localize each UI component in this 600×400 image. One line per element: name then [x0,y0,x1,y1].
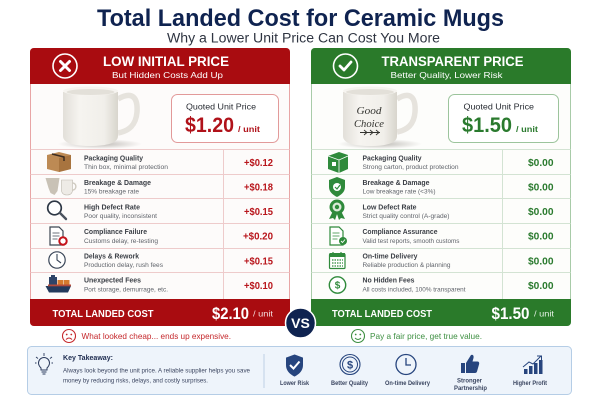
takeaway text: Key Takeaway: [63,353,113,362]
row: fees [46,275,273,294]
illustration: good choice mug [338,86,422,149]
row: compliance: +$0.20 [243,230,273,242]
benefit: stronger partnership [454,355,487,392]
price box: / unit [238,125,260,134]
row: breakage: $0.00 [528,182,554,194]
illustration: good choice mug: Choice [354,118,384,130]
benefit: better quality: $ [347,360,353,372]
row: packaging: Packaging Quality [84,154,144,162]
row: delays [49,252,273,269]
takeaway text: Always look beyond the unit price. A reliable supplier helps you save [63,368,250,374]
total bar: TOTAL LANDED COST [332,309,432,320]
row: fees: +$0.10 [244,280,273,292]
benefit: lower risk [280,355,309,387]
benefit: on-time delivery [385,354,430,387]
benefit: better quality: Better Quality [331,380,368,387]
title: Total Landed Cost for Ceramic Mugs [97,5,504,32]
row: defect: High Defect Rate [84,202,140,212]
row: no hidden fees: $ [335,280,341,292]
price box: Quoted Unit Price [464,102,535,112]
subheading: Better Quality, Lower Risk [390,70,503,80]
table: included costs [312,150,570,300]
takeaway text: money by reducing risks, delays, and costly surprises. [63,378,208,384]
row: packaging [47,152,273,172]
price box [172,94,278,142]
row: compliance [50,227,273,245]
row: compliance: Compliance Failure [84,227,147,236]
row: compliance: Compliance Assurance [362,227,438,236]
heading: LOW INITIAL PRICE [103,54,229,69]
icon: check in circle [334,54,358,78]
row: breakage: +$0.18 [244,182,273,194]
row: packaging: Strong carton, product protection [362,164,459,171]
row: fees: Unexpected Fees [84,276,141,284]
subheading: But Hidden Costs Add Up [112,70,223,80]
row: fees: Port storage, demurrage, etc. [84,286,168,294]
callout: left verdict: What looked cheap... ends up expensive. [82,331,231,341]
row: compliance: Customs delay, re-testing [84,238,158,245]
table: hidden costs [30,150,290,300]
total bar [311,299,571,326]
heading: TRANSPARENT PRICE [382,54,524,69]
row: low defect: Strict quality control (A-grade) [362,213,450,220]
illustration: plain mug [58,86,142,149]
row: compliance [330,227,554,245]
takeaway text [63,353,250,384]
row: packaging: Thin box, minimal protection [84,164,168,171]
row: no hidden fees [329,276,554,294]
row: low defect: Low Defect Rate [362,202,416,212]
price box: / unit [516,125,538,134]
row: delivery: Reliable production & planning [362,262,451,269]
subtitle: Why a Lower Unit Price Can Cost You More [167,30,440,46]
row: compliance: $0.00 [528,230,554,242]
row: delays: +$0.15 [244,256,273,268]
panel: key takeaway [28,346,572,394]
row: breakage: Breakage & Damage [84,178,151,187]
row: no hidden fees: No Hidden Fees [362,276,414,284]
icon: light bulb [35,353,53,374]
row: delivery: On-time Delivery [362,252,418,260]
total bar [30,299,290,326]
badge: VS: VS [291,315,310,331]
panel: transparent price [311,48,571,326]
icon: x in circle [53,54,77,78]
callout: right verdict: Pay a fair price, get true value. [370,331,482,341]
benefit: stronger partnership: Stronger [457,378,483,384]
panel: low initial price [30,48,290,326]
row: compliance: Valid test reports, smooth customs [362,238,460,245]
row: no hidden fees: All costs included, 100% transparent [362,286,466,294]
row: defect [48,201,273,220]
benefit: stronger partnership: Partnership [454,385,487,392]
row: breakage: Breakage & Damage [362,178,430,187]
benefit: better quality [331,354,368,387]
row: low defect: $0.00 [528,206,554,218]
row: delays: Delays & Rework [84,252,140,260]
row: packaging: +$0.12 [244,157,273,169]
row: breakage [46,178,273,196]
row: breakage: Low breakage rate (<3%) [362,188,436,196]
price box: $1.20 [185,114,234,137]
callout: right verdict [352,330,482,342]
total bar: $1.50 [492,305,530,323]
row: defect: +$0.15 [244,206,273,218]
row: low defect [329,200,554,220]
divider [263,354,265,388]
illustration: good choice mug: Good [356,105,382,117]
row: delivery [330,252,554,269]
row: no hidden fees: $0.00 [528,280,554,292]
row: packaging: $0.00 [528,157,554,169]
badge: VS [286,308,316,338]
panel header [311,48,571,84]
total bar: / unit [534,310,555,318]
row: delivery: $0.00 [528,256,554,268]
callout: left verdict [62,330,231,342]
row: breakage: 15% breakage rate [84,188,139,196]
benefit: higher profit [513,356,548,387]
row: defect: Poor quality, inconsistent [84,213,157,220]
price box [448,94,558,142]
total bar: TOTAL LANDED COST [52,309,154,320]
row: packaging [328,152,554,173]
total bar: / unit [253,310,274,318]
benefit: lower risk: Lower Risk [280,380,309,387]
row: packaging: Packaging Quality [362,154,422,162]
price box: Quoted Unit Price [186,102,257,112]
benefit: on-time delivery: On-time Delivery [385,380,430,387]
row: breakage [329,177,554,197]
benefit: higher profit: Higher Profit [513,380,548,387]
price box: $1.50 [462,114,512,137]
total bar: $2.10 [212,305,249,323]
row: delays: Production delay, rush fees [84,262,164,269]
panel header [30,48,290,84]
